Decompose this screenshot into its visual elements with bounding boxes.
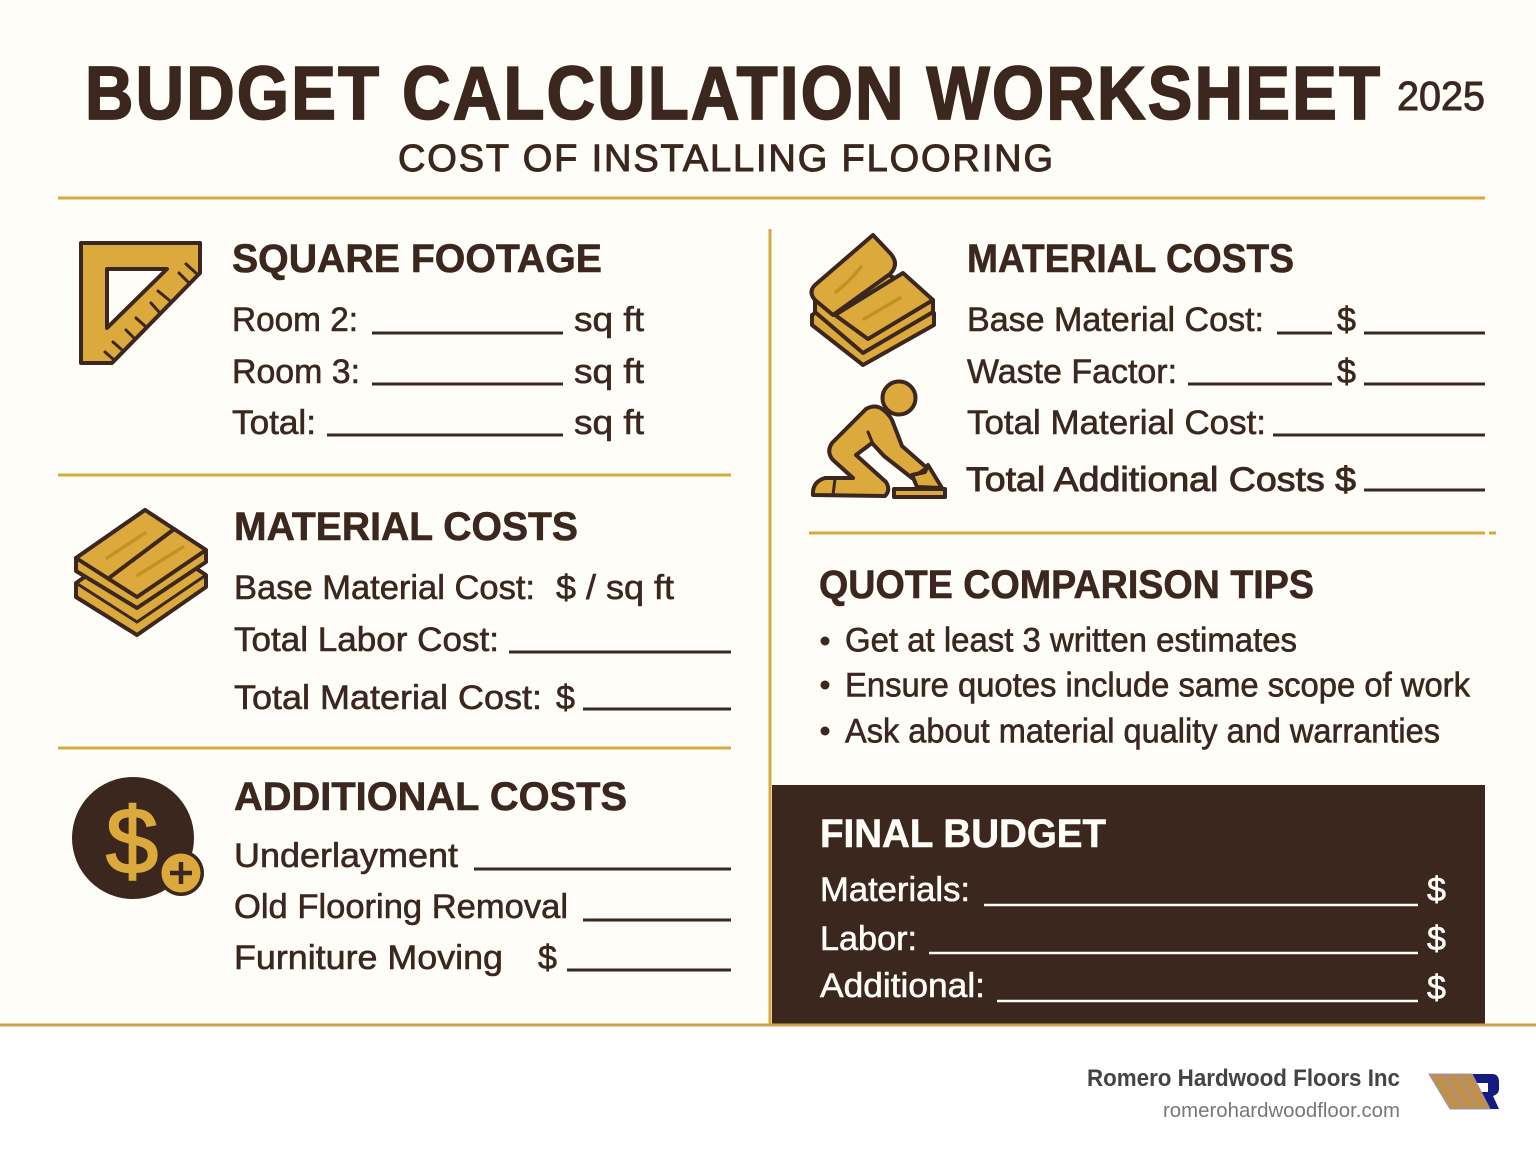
panel: material costs right xyxy=(966,237,1485,499)
row: additional xyxy=(820,967,1446,1007)
row: base material cost: Base Material Cost: xyxy=(967,301,1264,339)
footer brand xyxy=(1087,1065,1499,1122)
row: total: sq ft xyxy=(574,404,645,442)
tip 3: Ask about material quality and warranties xyxy=(845,712,1440,750)
row: labor: Labor: xyxy=(820,920,917,958)
panel: final budget xyxy=(772,785,1485,1025)
row: furniture moving: Furniture Moving xyxy=(234,939,503,977)
row: total: Total: xyxy=(232,404,316,442)
icon: dollar with plus xyxy=(72,777,204,899)
row: base material cost xyxy=(234,569,675,607)
icon: rafter square xyxy=(81,243,200,363)
tip 1: Get at least 3 written estimates xyxy=(845,622,1297,660)
row: total material cost: $ xyxy=(556,679,575,717)
row: room 2: Room 2: xyxy=(232,301,358,339)
row: base material cost: Base Material Cost: xyxy=(234,569,535,607)
row: labor: $ xyxy=(1427,920,1446,958)
panel: material costs left xyxy=(234,505,731,717)
tip 2: Ensure quotes include same scope of work xyxy=(845,666,1471,704)
icon: dollar with plus: $ xyxy=(106,788,158,893)
row: room 3: Room 3: xyxy=(232,353,360,391)
row: base material cost: $ / sq ft xyxy=(556,569,675,607)
subtitle: COST OF INSTALLING FLOORING xyxy=(398,138,1053,180)
row: old flooring removal: Old Flooring Removal xyxy=(234,888,568,926)
row: furniture moving xyxy=(234,939,731,977)
website: romerohardwoodfloor.com xyxy=(1163,1100,1400,1122)
row: additional: $ xyxy=(1427,969,1446,1007)
panel: square footage xyxy=(232,237,645,442)
heading: SQUARE FOOTAGE xyxy=(232,237,602,281)
heading: QUOTE COMPARISON TIPS xyxy=(819,563,1314,607)
title block xyxy=(85,53,1485,180)
row: room 2: sq ft xyxy=(574,301,645,339)
row: labor xyxy=(820,920,1446,958)
row: additional: Additional: xyxy=(820,967,985,1005)
year: 2025 xyxy=(1397,73,1485,119)
row: total material cost: Total Material Cost: xyxy=(234,679,542,717)
row: room 2 xyxy=(232,301,645,339)
row: waste factor: Waste Factor: xyxy=(967,353,1177,391)
heading: FINAL BUDGET xyxy=(820,812,1106,856)
row: room 3: sq ft xyxy=(574,353,645,391)
row: underlayment: Underlayment xyxy=(234,837,459,875)
row: total material cost: Total Material Cost: xyxy=(967,404,1266,442)
row: materials: Materials: xyxy=(820,871,970,909)
heading: MATERIAL COSTS xyxy=(234,505,578,549)
heading: ADDITIONAL COSTS xyxy=(234,775,627,819)
row: waste factor: $ xyxy=(1337,353,1356,391)
main title: BUDGET CALCULATION WORKSHEET xyxy=(85,53,1380,136)
row: waste factor xyxy=(967,353,1485,391)
row: total labor cost: Total Labor Cost: xyxy=(234,621,499,659)
row: base material cost xyxy=(967,301,1485,339)
row: furniture moving: $ xyxy=(538,939,557,977)
icon: stacked planks xyxy=(76,510,206,635)
panel: additional costs xyxy=(234,775,731,977)
icon: bent planks xyxy=(812,235,934,365)
row: materials xyxy=(820,871,1446,909)
row: total xyxy=(232,404,645,442)
row: total additional costs: Total Additional Costs $ xyxy=(966,461,1356,499)
company name: Romero Hardwood Floors Inc xyxy=(1087,1065,1400,1092)
row: base material cost: $ xyxy=(1337,301,1356,339)
panel: quote comparison tips xyxy=(819,563,1471,750)
heading: MATERIAL COSTS xyxy=(967,237,1294,281)
row: room 3 xyxy=(232,353,645,391)
row: total material cost xyxy=(234,679,731,717)
logo xyxy=(1429,1074,1499,1109)
row: materials: $ xyxy=(1427,871,1446,909)
icon: kneeling installer xyxy=(813,382,945,497)
